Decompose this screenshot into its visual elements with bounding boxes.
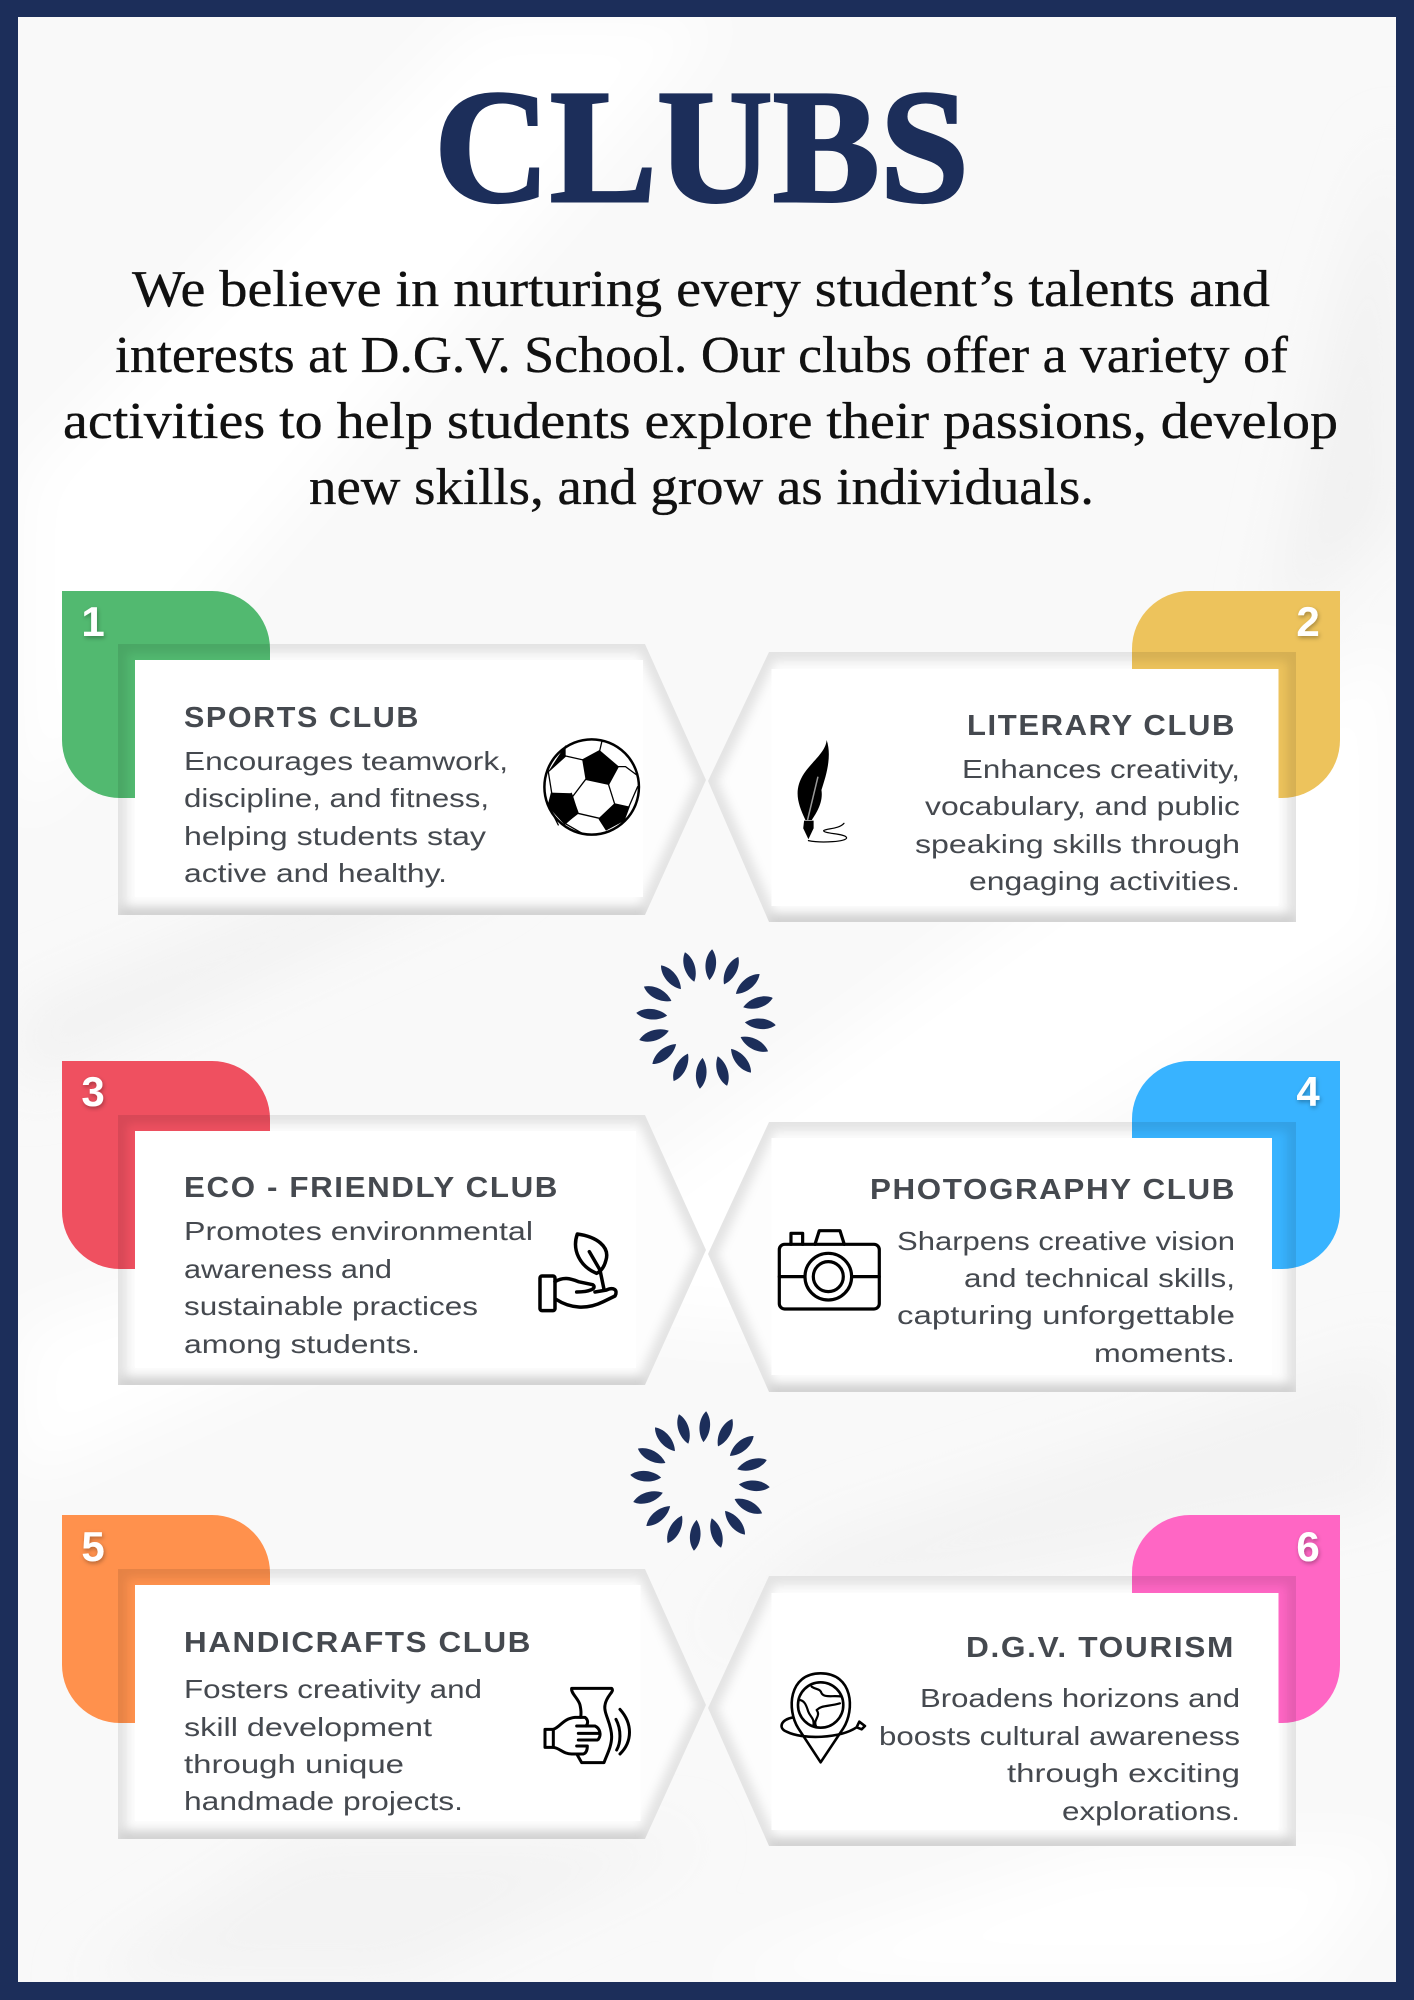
panel: d.g.v. tourism	[708, 1515, 1340, 1846]
description: sports club: helping students stay	[184, 821, 486, 851]
description: eco-friendly club: sustainable practices	[184, 1291, 478, 1321]
panel: eco-friendly club	[62, 1061, 706, 1385]
panel: handicrafts club	[62, 1515, 706, 1839]
description: literary club	[915, 754, 1240, 896]
spinner decoration 1	[636, 949, 776, 1089]
panel: sports club	[62, 591, 706, 915]
panel: literary club	[708, 591, 1340, 922]
description: d.g.v. tourism: boosts cultural awareness	[879, 1721, 1240, 1751]
description: literary club: Enhances creativity,	[962, 754, 1240, 784]
icon: globe location pin	[782, 1673, 865, 1762]
description: d.g.v. tourism: explorations.	[1062, 1796, 1240, 1826]
heading: sports club: SPORTS CLUB	[184, 702, 420, 734]
icon: soccer ball	[544, 739, 639, 835]
description: d.g.v. tourism: through exciting	[1007, 1758, 1240, 1788]
heading: d.g.v. tourism: D.G.V. TOURISM	[966, 1632, 1235, 1664]
description: d.g.v. tourism	[879, 1683, 1240, 1826]
description: photography club: moments.	[1094, 1338, 1235, 1368]
description: sports club: discipline, and fitness,	[184, 783, 489, 813]
description: literary club: engaging activities.	[969, 866, 1240, 896]
description: photography club: Sharpens creative vision	[897, 1226, 1235, 1256]
number badge 5: 5	[81, 1523, 105, 1570]
description: sports club: active and healthy.	[184, 858, 447, 888]
number badge 4: 4	[1296, 1068, 1320, 1115]
description: eco-friendly club: awareness and	[184, 1254, 392, 1284]
intro paragraph: interests at D.G.V. School. Our clubs offer a variety of	[115, 327, 1289, 384]
heading: photography club: PHOTOGRAPHY CLUB	[870, 1174, 1236, 1206]
heading: eco-friendly club: ECO - FRIENDLY CLUB	[184, 1172, 559, 1204]
title: CLUBS	[434, 58, 969, 237]
intro paragraph: new skills, and grow as individuals.	[309, 459, 1094, 516]
description: eco-friendly club	[184, 1216, 533, 1359]
description: handicrafts club	[184, 1674, 482, 1816]
icon: hand shaping vase	[545, 1688, 629, 1763]
description: handicrafts club: skill development	[184, 1712, 433, 1742]
number badge 3: 3	[81, 1068, 105, 1115]
icon: hand holding plant	[540, 1234, 616, 1311]
heading: literary club: LITERARY CLUB	[967, 710, 1236, 742]
intro paragraph: activities to help students explore their passions, develop	[63, 393, 1338, 450]
description: handicrafts club: handmade projects.	[184, 1786, 463, 1816]
description: photography club	[897, 1226, 1235, 1368]
number badge 1: 1	[81, 598, 105, 645]
description: d.g.v. tourism: Broadens horizons and	[920, 1683, 1240, 1713]
icon: feather quill	[798, 740, 847, 842]
description: eco-friendly club: among students.	[184, 1329, 420, 1359]
heading: handicrafts club: HANDICRAFTS CLUB	[184, 1627, 532, 1659]
description: handicrafts club: Fosters creativity and	[184, 1674, 482, 1704]
description: photography club: and technical skills,	[964, 1263, 1235, 1293]
description: sports club	[184, 746, 508, 888]
description: handicrafts club: through unique	[184, 1749, 404, 1779]
description: photography club: capturing unforgettable	[897, 1300, 1235, 1330]
intro paragraph	[63, 261, 1338, 516]
description: eco-friendly club: Promotes environmental	[184, 1216, 533, 1246]
spinner decoration 2	[630, 1411, 770, 1551]
intro paragraph: We believe in nurturing every student’s talents and	[132, 261, 1270, 318]
description: literary club: vocabulary, and public	[925, 791, 1240, 821]
icon: camera	[779, 1231, 879, 1309]
panel: photography club	[708, 1061, 1340, 1392]
description: literary club: speaking skills through	[915, 829, 1240, 859]
number badge 6: 6	[1296, 1523, 1320, 1570]
description: sports club: Encourages teamwork,	[184, 746, 508, 776]
number badge 2: 2	[1296, 598, 1320, 645]
